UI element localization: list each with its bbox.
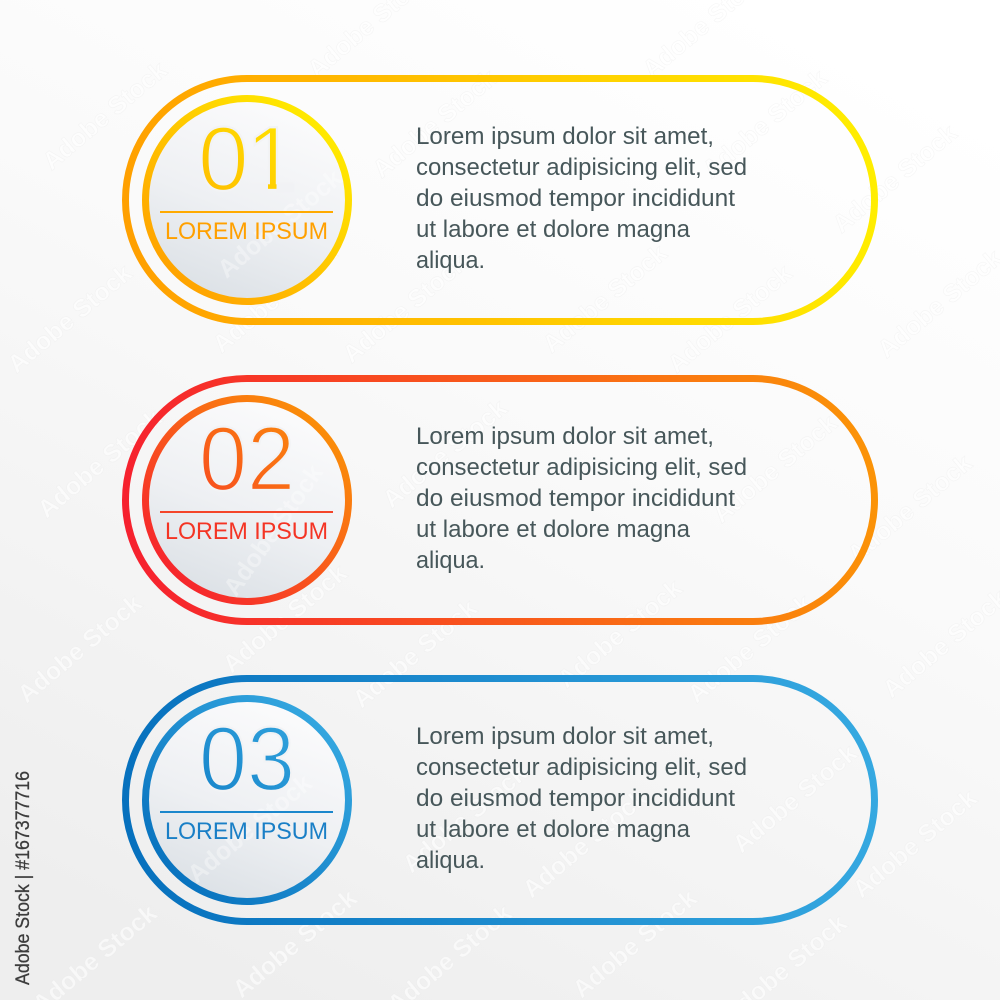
infographic canvas: Adobe Stock [397,759,532,879]
infographic canvas: Adobe Stock [707,409,842,529]
infographic canvas: Adobe Stock [842,449,977,569]
infographic canvas: Adobe Stock [207,239,342,359]
panel: step 01 [126,78,874,322]
description text 02: Lorem ipsum dolor sit amet, [416,423,714,450]
description text 03: Lorem ipsum dolor sit amet, [416,723,714,750]
number badge 01: LOREM IPSUM [165,218,328,245]
infographic canvas: Adobe Stock [217,559,352,679]
description text 01: ut labore et dolore magna [416,216,691,243]
description text 03: consectetur adipisicing elit, sed [416,754,747,781]
infographic canvas: Adobe Stock [367,64,502,184]
description text 02 [416,423,747,574]
description text 01: aliqua. [416,247,485,274]
number badge 02: LOREM IPSUM [165,518,328,545]
infographic canvas: Adobe Stock [347,594,482,714]
description text 03: do eiusmod tempor incididunt [416,785,735,812]
description text 02: ut labore et dolore magna [416,516,691,543]
description text 01: consectetur adipisicing elit, sed [416,154,747,181]
number badge 03 [146,698,348,902]
outer pill outline 03 [126,678,874,922]
infographic canvas: Adobe Stock [377,394,512,514]
infographic canvas: Adobe Stock [827,119,962,239]
description text 01: do eiusmod tempor incididunt [416,185,735,212]
infographic canvas: Adobe Stock [697,64,832,184]
infographic canvas: Adobe Stock [517,784,652,904]
description text 01: Lorem ipsum dolor sit amet, [416,123,714,150]
number badge 01: 0 [198,109,249,210]
number badge 03: Adobe Stock [182,769,317,889]
outer pill outline 02 [126,378,874,622]
infographic canvas: Adobe Stock [662,259,797,379]
infographic canvas: Adobe Stock [12,589,147,709]
description text 03 [416,723,747,874]
description text 02: consectetur adipisicing elit, sed [416,454,747,481]
infographic canvas: Adobe Stock [552,574,687,694]
infographic canvas: Adobe Stock [337,249,472,369]
description text 02: do eiusmod tempor incididunt [416,485,735,512]
number badge 02: Adobe Stock [218,460,329,601]
description text 03: aliqua. [416,847,485,874]
infographic canvas: Adobe Stock [847,784,982,904]
stock id side text: Adobe Stock | #167377716 [13,771,34,985]
infographic canvas: Adobe Stock [727,739,862,859]
description text 03: ut labore et dolore magna [416,816,691,843]
infographic canvas: Adobe Stock [37,56,172,176]
number badge 02 [146,398,348,602]
number badge 03: 03 [199,709,295,810]
outer pill outline 01 [126,78,874,322]
number badge 02: 02 [199,409,295,510]
infographic canvas: Adobe Stock [682,589,817,709]
panel: step 02 [126,378,874,622]
infographic canvas: Adobe Stock [537,239,672,359]
number badge 01 [146,98,348,302]
number badge 03: LOREM IPSUM [165,818,328,845]
number badge 01: 1 [246,109,297,210]
infographic canvas: Adobe Stock [32,404,167,524]
description text 01 [416,123,747,274]
description text 02: aliqua. [416,547,485,574]
panel: step 03 [126,678,874,922]
infographic canvas: Adobe Stock [2,259,137,379]
number badge 01: Adobe Stock [212,164,347,284]
